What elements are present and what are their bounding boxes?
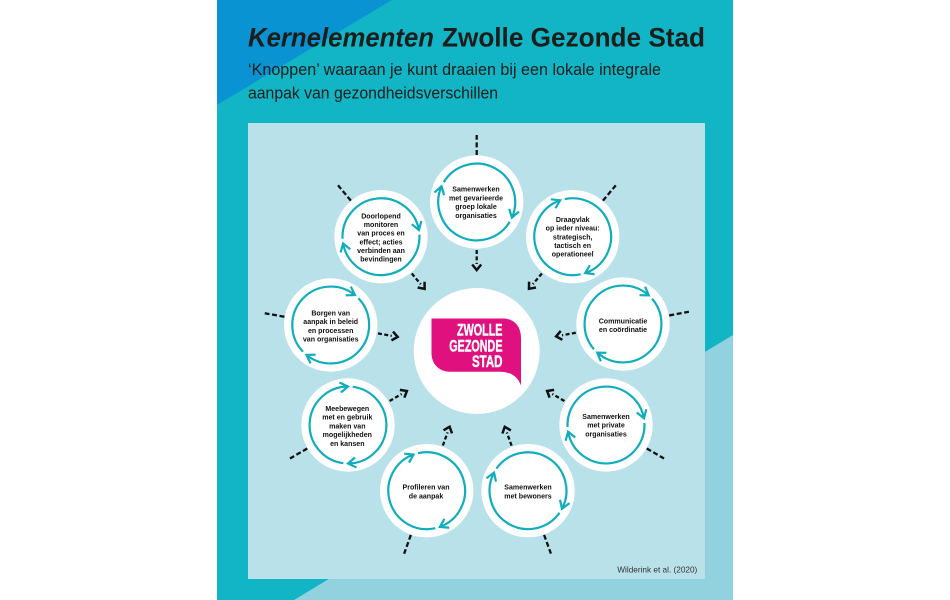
knob: meebewegen met en gebruik maken van mogelijkheden en kansen: en kansen (330, 441, 365, 448)
knob: doorlopend monitoren van proces en effect: Doorlopend (361, 213, 401, 220)
knob: samenwerken met gevarieerde groep lokale organisaties: Samenwerken (452, 187, 500, 194)
light teal corner triangle (294, 335, 733, 600)
knob: meebewegen met en gebruik maken van mogelijkheden en kansen: Meebewegen (325, 406, 369, 413)
subtitle: aanpak van gezondheidsverschillen (248, 84, 498, 103)
logo text (449, 321, 502, 371)
knob: profileren van de aanpak: Profileren van (402, 484, 450, 491)
knob: meebewegen met en gebruik maken van mogelijkheden en kansen: maken van (329, 423, 366, 430)
knob: meebewegen met en gebruik maken van mogelijkheden en kansen: met en gebruik (322, 415, 372, 422)
knob: communicatie en coördinatie: en coördinatie (599, 327, 647, 334)
subtitle: ‘Knoppen’ waaraan je kunt draaien bij een lokale integrale (248, 60, 661, 79)
knob: samenwerken met private organisaties: Samenwerken (582, 414, 630, 421)
knob: borgen van aanpak in beleid: van organisaties (303, 336, 359, 343)
knob: samenwerken met private organisaties: met private (587, 423, 625, 430)
logo text: ZWOLLE (457, 321, 502, 340)
knob: draagvlak op ieder niveau: strategisch, (553, 234, 593, 241)
knob: meebewegen met en gebruik maken van mogelijkheden en kansen (288, 378, 409, 472)
knob: samenwerken met private organisaties: organisaties (585, 432, 627, 439)
knob: samenwerken met gevarieerde groep lokale organisaties: organisaties (455, 213, 497, 220)
title: Kernelementen (248, 22, 434, 52)
knob: doorlopend monitoren van proces en effect: effect; acties (359, 239, 403, 246)
knob: draagvlak op ieder niveau: tactisch en (554, 243, 591, 250)
knob: meebewegen met en gebruik maken van mogelijkheden en kansen: mogelijkheden (323, 432, 372, 439)
title: Zwolle Gezonde Stad (442, 22, 705, 52)
knob: doorlopend monitoren van proces en effect: monitoren (364, 222, 398, 229)
knob: samenwerken met gevarieerde groep lokale organisaties: groep lokale (455, 204, 497, 211)
knob: doorlopend monitoren van proces en effect: verbinden aan (357, 248, 405, 255)
source credit: Wilderink et al. (2020) (617, 565, 697, 575)
knob: communicatie en coördinatie (555, 267, 690, 381)
logo text: STAD (472, 352, 502, 371)
panel: diagram (248, 123, 705, 579)
knob: borgen van aanpak in beleid: aanpak in beleid (303, 319, 358, 326)
knob: samenwerken met bewoners: Samenwerken (504, 484, 552, 491)
knob: samenwerken met gevarieerde groep lokale organisaties: met gevarieerde (449, 196, 503, 202)
logo text: GEZONDE (449, 337, 502, 356)
knob: doorlopend monitoren van proces en effect (332, 182, 430, 292)
knob: samenwerken met gevarieerde groep lokale organisaties (422, 135, 531, 270)
knob: doorlopend monitoren van proces en effect: bevindingen (360, 257, 402, 264)
knob: draagvlak op ieder niveau: operationeel (552, 252, 594, 259)
knob: borgen van aanpak in beleid (264, 268, 398, 382)
knob: samenwerken met bewoners (472, 425, 584, 555)
title (248, 22, 705, 52)
subtitle (248, 60, 661, 103)
knob: borgen van aanpak in beleid: Borgen van (311, 310, 350, 317)
knob: doorlopend monitoren van proces en effect: van proces en (357, 231, 405, 238)
blue corner triangle (217, 0, 392, 105)
knob: samenwerken met bewoners: met bewoners (504, 493, 552, 500)
knob: profileren van de aanpak (376, 425, 477, 555)
central hub with logo (414, 288, 540, 414)
knob: borgen van aanpak in beleid: en processen (308, 328, 353, 335)
knob: profileren van de aanpak: de aanpak (409, 493, 443, 500)
knob: draagvlak op ieder niveau: op ieder niveau: (546, 226, 600, 233)
knob: draagvlak op ieder niveau (523, 182, 623, 292)
knob: communicatie en coördinatie: Communicatie (599, 318, 647, 325)
knob: samenwerken met private organisaties (545, 378, 666, 472)
logo speech bubble (432, 318, 521, 386)
poster background (217, 0, 733, 600)
knob: draagvlak op ieder niveau: Draagvlak (556, 217, 590, 224)
